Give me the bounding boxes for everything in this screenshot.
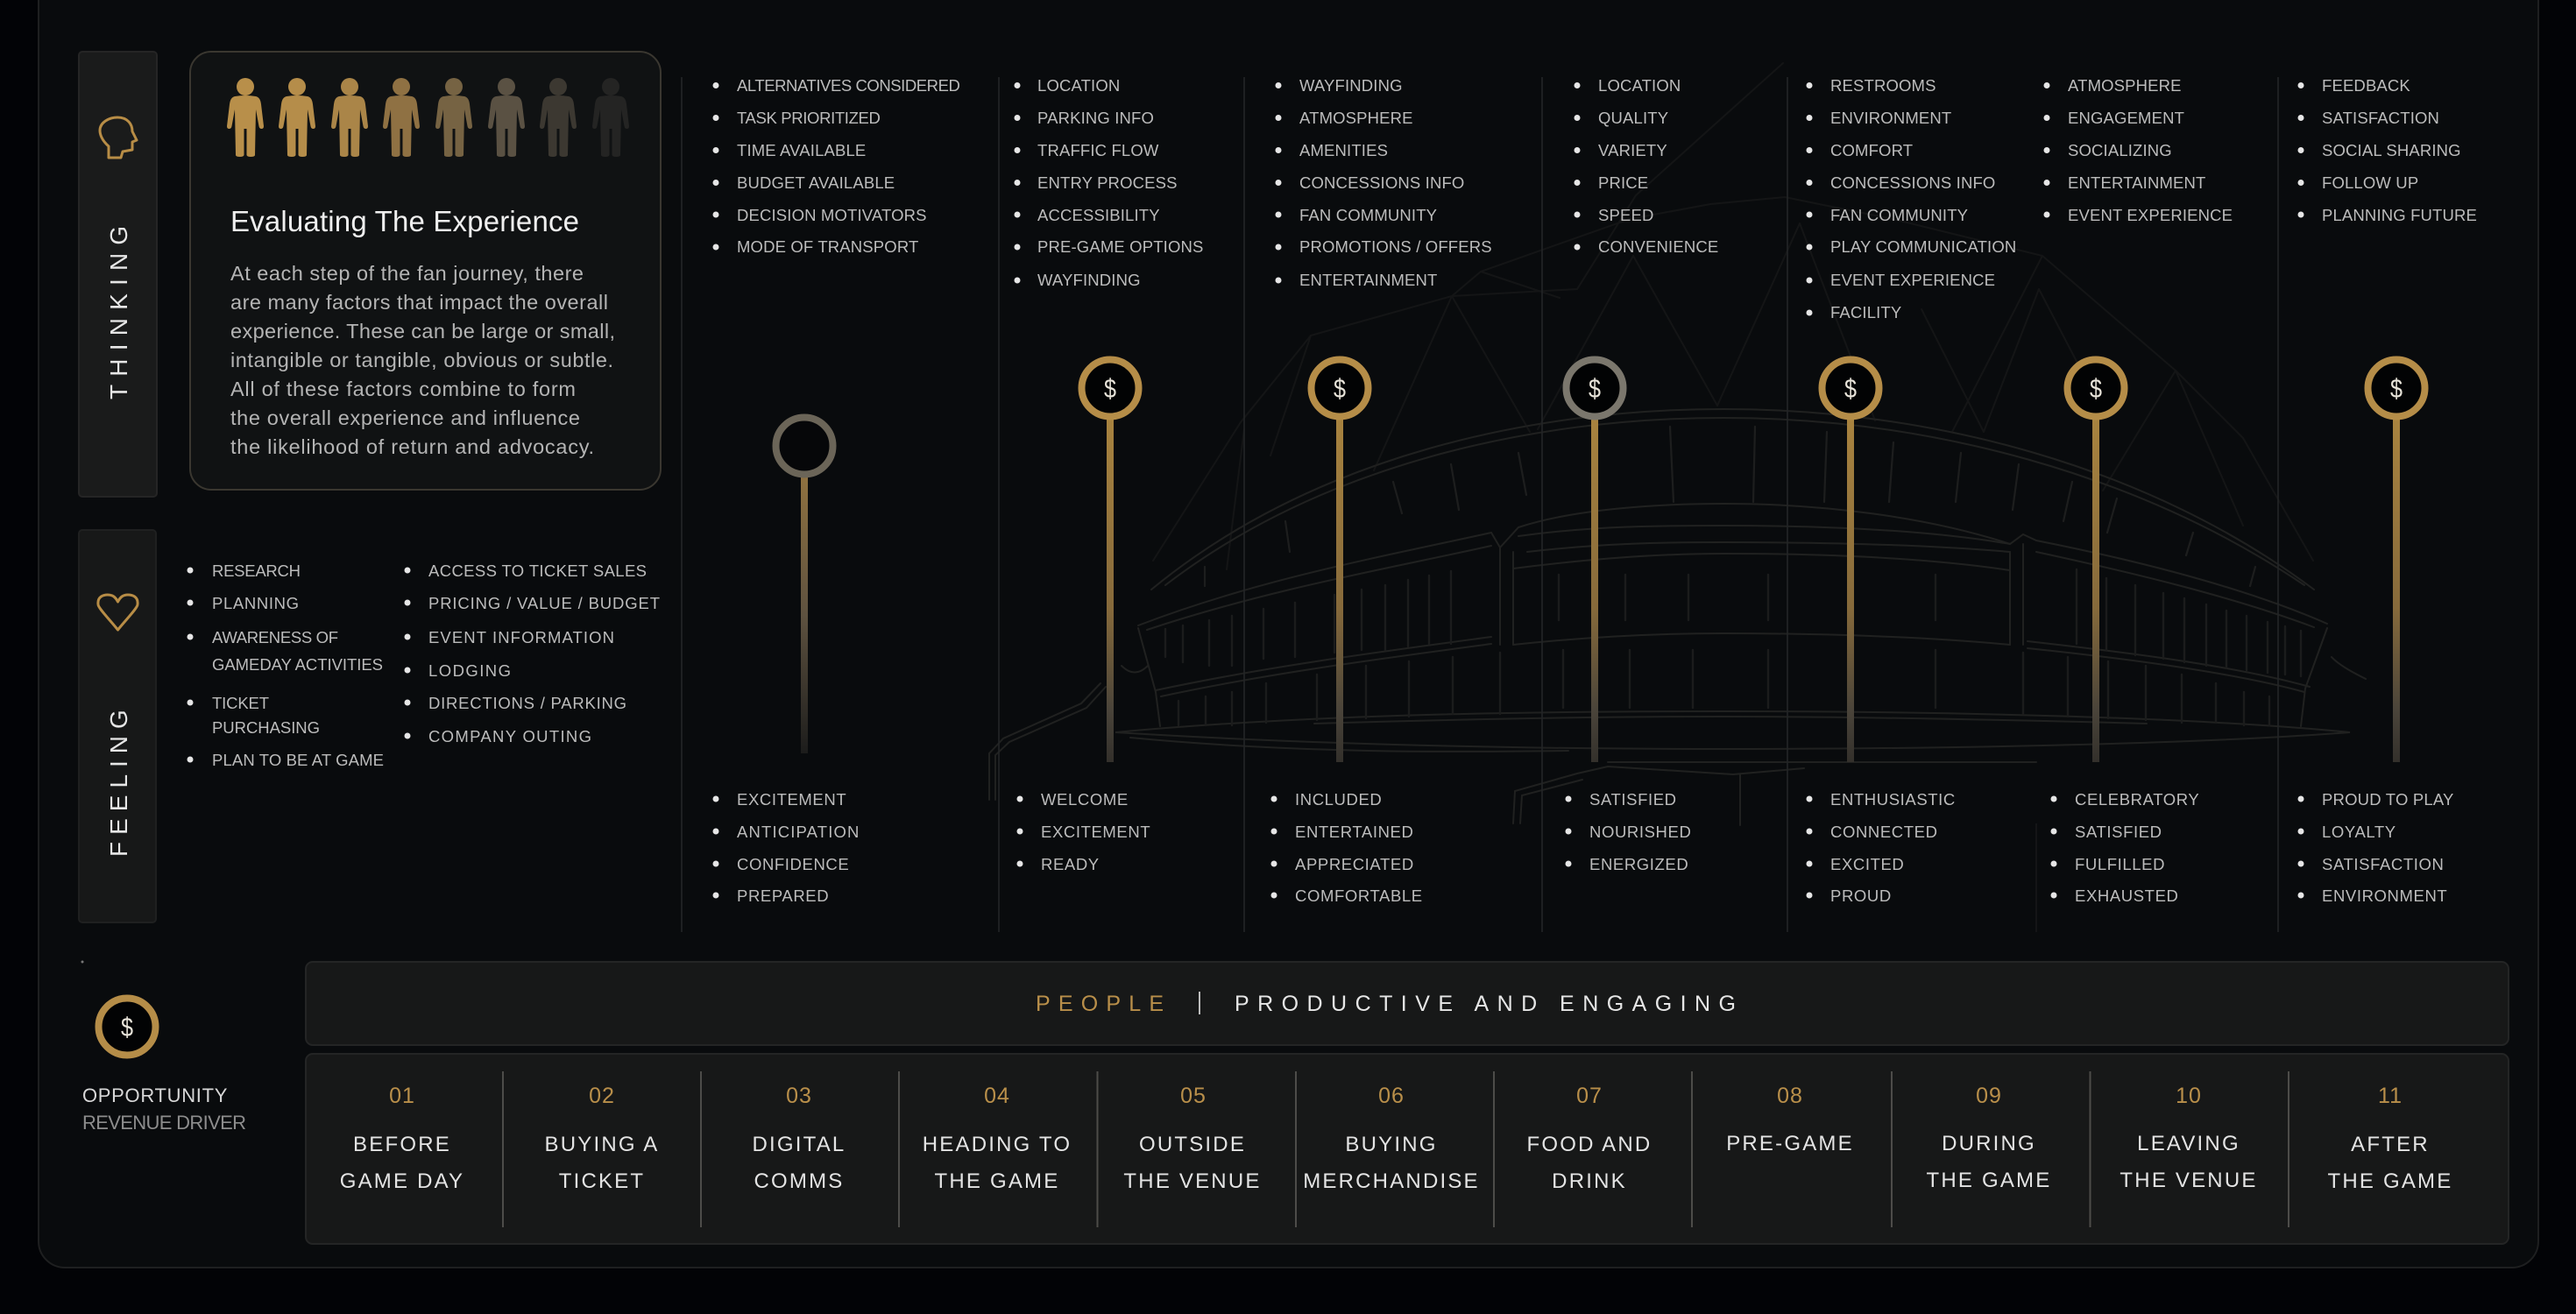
thinking list: step 6 <box>2043 76 2233 224</box>
feeling list: step 4: ENERGIZED <box>1589 855 1688 873</box>
feeling list: column 1: PLANNING <box>212 594 299 612</box>
banner text: PEOPLE <box>1036 992 1164 1016</box>
feeling list: step 1: ANTICIPATION <box>737 823 860 841</box>
thinking list: step 4 <box>1574 76 1718 256</box>
step 11 <box>2328 1084 2452 1193</box>
feeling list: step 3: ENTERTAINED <box>1295 823 1413 841</box>
thinking list: step 4: VARIETY <box>1598 141 1667 159</box>
thinking list: step 7: SATISFACTION <box>2322 109 2439 127</box>
opportunity pin: step 2 <box>1081 359 1139 762</box>
column dividers <box>682 77 2278 932</box>
panel: thinking label <box>79 52 157 497</box>
body text <box>230 262 615 458</box>
thinking list: step 2: LOCATION <box>1037 76 1120 95</box>
thinking list: step 2 <box>1015 76 1203 289</box>
thinking list: step 3: WAYFINDING <box>1299 76 1403 95</box>
heading: Evaluating The Experience <box>230 205 579 237</box>
thinking list: step 1 <box>713 76 960 256</box>
feeling text: FEELING <box>105 703 132 857</box>
feeling list: step 6 <box>2050 790 2199 905</box>
thinking list: step 6: SOCIALIZING <box>2068 141 2172 159</box>
feeling list: step 7: LOYALTY <box>2322 823 2396 841</box>
legend text <box>82 1084 247 1134</box>
feeling list: step 1 <box>713 790 860 905</box>
feeling list: step 3 <box>1270 790 1423 905</box>
feeling list: column 1: PURCHASING <box>212 718 320 737</box>
legend: opportunity revenue driver <box>81 960 247 1134</box>
feeling list: step 6: CELEBRATORY <box>2075 790 2199 809</box>
step 06: MERCHANDISE <box>1303 1169 1480 1193</box>
step 05: 05 <box>1180 1084 1207 1108</box>
panel: people banner <box>306 962 2509 1045</box>
thinking list: step 4: QUALITY <box>1598 109 1668 127</box>
step 02: TICKET <box>559 1169 645 1193</box>
opportunity pin: step 4: $ <box>1589 373 1601 404</box>
body text: experience. These can be large or small, <box>230 320 615 343</box>
feeling list: step 6: FULFILLED <box>2075 855 2165 873</box>
feeling list: step 6: EXHAUSTED <box>2075 887 2178 905</box>
opportunity pin: step 7 <box>2367 359 2425 762</box>
body text: the likelihood of return and advocacy. <box>230 435 594 458</box>
step 08: 08 <box>1777 1084 1803 1108</box>
step 01: GAME DAY <box>340 1169 464 1193</box>
thinking list: step 3: PROMOTIONS / OFFERS <box>1299 237 1492 256</box>
feeling list: step 3: COMFORTABLE <box>1295 887 1423 905</box>
feeling list: step 5: EXCITED <box>1830 855 1904 873</box>
feeling list: step 2 <box>1016 790 1150 873</box>
opportunity pin: step 7: $ <box>2390 373 2403 404</box>
opportunity pin: step 3 <box>1311 359 1369 762</box>
thinking list: step 7: SOCIAL SHARING <box>2322 141 2461 159</box>
thinking list: step 7 <box>2297 76 2477 224</box>
feeling list: step 6: SATISFIED <box>2075 823 2162 841</box>
thinking list: step 4: CONVENIENCE <box>1598 237 1718 256</box>
thinking list: step 4: LOCATION <box>1598 76 1681 95</box>
feeling list: column 2 <box>405 562 660 745</box>
step 10: LEAVING <box>2137 1132 2240 1155</box>
feeling list: column 1: AWARENESS OF <box>212 628 338 646</box>
thinking list: step 6: ENTERTAINMENT <box>2068 173 2206 192</box>
step 09: THE GAME <box>1927 1169 2051 1192</box>
banner text: PRODUCTIVE AND ENGAGING <box>1235 992 1736 1016</box>
legend text: OPPORTUNITY <box>82 1084 229 1106</box>
step 05 <box>1123 1084 1262 1193</box>
thinking list: step 5: EVENT EXPERIENCE <box>1830 271 1995 289</box>
feeling list: column 2: COMPANY OUTING <box>428 727 591 745</box>
step 10: THE VENUE <box>2120 1169 2258 1192</box>
thinking list: step 1: BUDGET AVAILABLE <box>737 173 895 192</box>
step 11: 11 <box>2378 1084 2403 1108</box>
opportunity pin: no revenue step <box>776 417 832 753</box>
feeling list: column 1 <box>188 562 384 769</box>
body text: the overall experience and influence <box>230 406 580 429</box>
thinking list: step 5: PLAY COMMUNICATION <box>1830 237 2016 256</box>
body text: are many factors that impact the overall <box>230 291 608 314</box>
step 04 <box>923 1084 1072 1193</box>
thinking list: step 2: TRAFFIC FLOW <box>1037 141 1159 159</box>
step 04: HEADING TO <box>923 1133 1072 1156</box>
feeling list: step 4 <box>1565 790 1691 873</box>
opportunity pin: step 6: $ <box>2090 373 2102 404</box>
thinking list: step 1: TIME AVAILABLE <box>737 141 866 159</box>
step 03: DIGITAL <box>753 1133 846 1156</box>
step 01: BEFORE <box>353 1133 451 1156</box>
thinking list: step 4: SPEED <box>1598 206 1653 224</box>
thinking text: THINKING <box>105 218 132 399</box>
thinking list: step 5: RESTROOMS <box>1830 76 1936 95</box>
step 08: PRE-GAME <box>1726 1132 1854 1155</box>
thinking list: step 3: ATMOSPHERE <box>1299 109 1413 127</box>
body text: All of these factors combine to form <box>230 378 576 400</box>
feeling list: step 2: EXCITEMENT <box>1041 823 1150 841</box>
thinking list: step 2: PRE-GAME OPTIONS <box>1037 237 1203 256</box>
step 09: 09 <box>1976 1084 2002 1108</box>
opportunity pin: step 6 <box>2068 359 2124 762</box>
step 11: THE GAME <box>2328 1169 2452 1193</box>
step 07: DRINK <box>1552 1169 1627 1193</box>
panel: evaluating the experience <box>190 52 661 490</box>
step 09: DURING <box>1942 1132 2036 1155</box>
thinking list: step 7: FEEDBACK <box>2322 76 2410 95</box>
step 05: THE VENUE <box>1123 1169 1262 1193</box>
thinking list: step 3: CONCESSIONS INFO <box>1299 173 1464 192</box>
icon: head <box>100 117 137 158</box>
step 06: 06 <box>1378 1084 1405 1108</box>
step 10: 10 <box>2176 1084 2202 1108</box>
thinking list: step 7: PLANNING FUTURE <box>2322 206 2477 224</box>
legend text: REVENUE DRIVER <box>82 1112 247 1134</box>
feeling list: column 1: RESEARCH <box>212 562 301 580</box>
step 09 <box>1927 1084 2051 1192</box>
step 08 <box>1726 1084 1854 1155</box>
feeling list: step 5: ENTHUSIASTIC <box>1830 790 1956 809</box>
thinking list: step 6: ATMOSPHERE <box>2068 76 2182 95</box>
step 01: 01 <box>389 1084 415 1108</box>
feeling list: column 2: EVENT INFORMATION <box>428 628 614 646</box>
panel: feeling label <box>79 530 156 922</box>
step 04: 04 <box>984 1084 1010 1108</box>
feeling list: step 2: READY <box>1041 855 1100 873</box>
feeling list: step 4: NOURISHED <box>1589 823 1691 841</box>
thinking list: step 1: MODE OF TRANSPORT <box>737 237 918 256</box>
step 10 <box>2120 1084 2258 1192</box>
opportunity pin: step 2: $ <box>1104 373 1116 404</box>
thinking list: step 1: ALTERNATIVES CONSIDERED <box>737 76 960 95</box>
panel: journey steps <box>306 1054 2509 1244</box>
feeling list: step 5: PROUD <box>1830 887 1892 905</box>
feeling list: column 2: LODGING <box>428 661 511 680</box>
feeling list: step 7 <box>2297 790 2454 905</box>
people icons row <box>227 78 629 157</box>
thinking list: step 5 <box>1807 76 2016 321</box>
thinking list: step 3: ENTERTAINMENT <box>1299 271 1437 289</box>
step 02: 02 <box>589 1084 615 1108</box>
thinking list: step 2: WAYFINDING <box>1037 271 1141 289</box>
opportunity pin: step 5: $ <box>1844 373 1857 404</box>
feeling list: step 1: CONFIDENCE <box>737 855 849 873</box>
step 04: THE GAME <box>935 1169 1059 1193</box>
feeling list: column 1: PLAN TO BE AT GAME <box>212 751 384 769</box>
thinking list: step 3 <box>1276 76 1492 289</box>
feeling list: column 2: ACCESS TO TICKET SALES <box>428 562 647 580</box>
feeling list: column 2: DIRECTIONS / PARKING <box>428 694 626 712</box>
feeling list: step 2: WELCOME <box>1041 790 1129 809</box>
feeling list: column 2: PRICING / VALUE / BUDGET <box>428 594 660 612</box>
step 02 <box>545 1084 659 1193</box>
thinking list: step 2: PARKING INFO <box>1037 109 1154 127</box>
opportunity pin: step 3: $ <box>1334 373 1346 404</box>
feeling list: step 7: PROUD TO PLAY <box>2322 790 2454 809</box>
thinking list: step 7: FOLLOW UP <box>2322 173 2418 192</box>
step 03 <box>753 1084 846 1193</box>
step 03: COMMS <box>754 1169 845 1193</box>
feeling list: step 7: SATISFACTION <box>2322 855 2444 873</box>
thinking list: step 5: ENVIRONMENT <box>1830 109 1951 127</box>
step 02: BUYING A <box>545 1133 659 1156</box>
feeling list: step 3: INCLUDED <box>1295 790 1382 809</box>
feeling list: step 1: EXCITEMENT <box>737 790 846 809</box>
feeling list: step 5: CONNECTED <box>1830 823 1938 841</box>
thinking list: step 5: FAN COMMUNITY <box>1830 206 1968 224</box>
thinking list: step 1: TASK PRIORITIZED <box>737 109 881 127</box>
step 07: 07 <box>1576 1084 1603 1108</box>
body text: At each step of the fan journey, there <box>230 262 584 285</box>
stadium line drawing <box>989 63 2366 825</box>
thinking list: step 4: PRICE <box>1598 173 1648 192</box>
opportunity pin: step 4 <box>1567 359 1623 762</box>
thinking list: step 3: FAN COMMUNITY <box>1299 206 1437 224</box>
feeling list: step 1: PREPARED <box>737 887 829 905</box>
step 03: 03 <box>786 1084 812 1108</box>
feeling list: step 7: ENVIRONMENT <box>2322 887 2447 905</box>
step 11: AFTER <box>2351 1133 2430 1156</box>
step 07 <box>1527 1084 1652 1193</box>
thinking list: step 1: DECISION MOTIVATORS <box>737 206 927 224</box>
body text: intangible or tangible, obvious or subtle. <box>230 349 613 371</box>
feeling list: column 1: GAMEDAY ACTIVITIES <box>212 655 383 674</box>
icon: heart <box>98 595 138 630</box>
thinking list: step 5: COMFORT <box>1830 141 1913 159</box>
step 07: FOOD AND <box>1527 1133 1652 1156</box>
thinking list: step 5: CONCESSIONS INFO <box>1830 173 1995 192</box>
feeling list: step 5 <box>1807 790 1956 905</box>
thinking list: step 2: ENTRY PROCESS <box>1037 173 1178 192</box>
opportunity pin: step 5 <box>1822 359 1879 762</box>
icon: gold coin <box>98 999 156 1055</box>
feeling list: step 3: APPRECIATED <box>1295 855 1414 873</box>
feeling list: column 1: TICKET <box>212 694 269 712</box>
step 01 <box>340 1084 464 1193</box>
thinking list: step 3: AMENITIES <box>1299 141 1388 159</box>
thinking list: step 6: EVENT EXPERIENCE <box>2068 206 2233 224</box>
feeling list: step 4: SATISFIED <box>1589 790 1677 809</box>
step 06: BUYING <box>1345 1133 1438 1156</box>
thinking list: step 2: ACCESSIBILITY <box>1037 206 1160 224</box>
step 06 <box>1303 1084 1480 1193</box>
thinking list: step 5: FACILITY <box>1830 303 1901 321</box>
icon: gold coin: $ <box>121 1012 133 1042</box>
thinking list: step 6: ENGAGEMENT <box>2068 109 2184 127</box>
step 05: OUTSIDE <box>1139 1133 1246 1156</box>
